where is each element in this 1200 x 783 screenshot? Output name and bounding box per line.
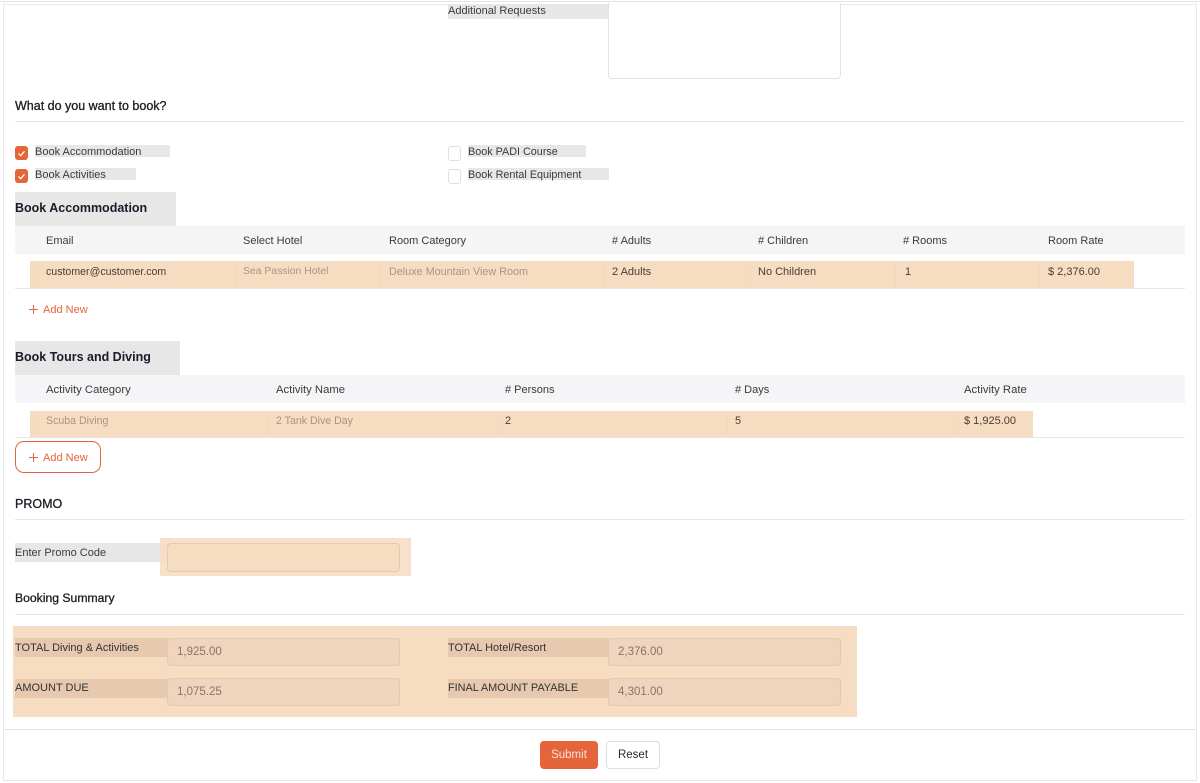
table data row: Scuba Diving <box>46 415 108 427</box>
table header row: # Days <box>735 384 769 396</box>
add new button: tours: Add New <box>43 452 88 464</box>
checkbox: book rental equipment <box>448 168 609 184</box>
amount due label <box>15 679 168 698</box>
total diving label <box>15 638 168 657</box>
checkbox: book padi course: Book PADI Course <box>468 146 558 158</box>
heading: book tours and diving: Book Tours and Diving <box>15 350 151 364</box>
add new link: accommodation: Add New <box>43 304 88 316</box>
table header row: Email <box>46 235 74 247</box>
reset button: Reset <box>618 749 648 761</box>
final amount label <box>448 679 609 698</box>
table header row: # Persons <box>505 384 555 396</box>
checkbox: book accommodation: Book Accommodation <box>35 146 141 158</box>
heading: book accommodation <box>15 192 176 226</box>
heading: book tours and diving <box>15 341 180 375</box>
table data row: customer@customer.com <box>46 266 166 278</box>
amount due value: 1,075.25 <box>177 686 222 698</box>
table header row: Activity Name <box>276 384 345 396</box>
textarea <box>608 3 841 79</box>
label: enter promo code <box>15 543 168 562</box>
table header row: # Rooms <box>903 235 947 247</box>
submit button <box>540 741 598 769</box>
table data row: 1 <box>905 266 911 278</box>
table data row: 2 <box>505 415 511 427</box>
checkbox: book accommodation <box>15 145 170 160</box>
total diving value <box>167 638 400 666</box>
final amount value: 4,301.00 <box>618 686 663 698</box>
add new button: tours <box>15 441 101 473</box>
final amount value <box>608 678 841 706</box>
label: additional requests <box>448 4 609 19</box>
label: enter promo code: Enter Promo Code <box>15 547 106 559</box>
table header row: # Adults <box>612 235 651 247</box>
table header row <box>15 226 1185 254</box>
reset button <box>606 741 660 769</box>
table data row: 5 <box>735 415 741 427</box>
total hotel label <box>448 638 609 657</box>
table data row: 2 Tank Dive Day <box>276 415 353 427</box>
table: tours <box>15 375 1185 437</box>
table data row: Deluxe Mountain View Room <box>389 266 528 278</box>
table data row: No Children <box>758 266 816 278</box>
checkbox: book activities <box>15 168 136 183</box>
label: additional requests: Additional Requests <box>448 5 546 17</box>
promo code field <box>15 538 411 576</box>
heading: book accommodation: Book Accommodation <box>15 201 147 215</box>
booking summary panel <box>13 626 857 717</box>
table header row: # Children <box>758 235 808 247</box>
heading: promo: PROMO <box>15 497 62 511</box>
submit button: Submit <box>551 749 587 761</box>
total hotel value: 2,376.00 <box>618 646 663 658</box>
total diving label: TOTAL Diving & Activities <box>15 642 139 654</box>
table data row: Sea Passion Hotel <box>243 266 328 277</box>
amount due value <box>167 678 400 706</box>
promo highlight <box>160 538 411 576</box>
table header row: Activity Category <box>46 384 131 396</box>
table header row <box>15 375 1185 403</box>
heading: booking summary: Booking Summary <box>15 591 115 605</box>
total hotel label: TOTAL Hotel/Resort <box>448 642 546 654</box>
amount due label: AMOUNT DUE <box>15 682 89 694</box>
table header row: Select Hotel <box>243 235 302 247</box>
table data row: $ 1,925.00 <box>964 415 1016 427</box>
heading: what do you want to book: What do you want to book? <box>15 99 166 113</box>
checkbox: book activities: Book Activities <box>35 169 106 181</box>
checkbox: book rental equipment: Book Rental Equipment <box>468 169 581 181</box>
total diving value: 1,925.00 <box>177 646 222 658</box>
total hotel value <box>608 638 841 666</box>
table data row: $ 2,376.00 <box>1048 266 1100 278</box>
promo input <box>167 543 400 572</box>
checkbox: book padi course <box>448 145 586 161</box>
additional requests field <box>448 3 841 79</box>
table data row: 2 Adults <box>612 266 651 278</box>
table header row: Room Rate <box>1048 235 1104 247</box>
final amount label: FINAL AMOUNT PAYABLE <box>448 682 578 694</box>
table data row <box>30 411 1033 437</box>
table: accommodation <box>15 226 1185 288</box>
table header row: Room Category <box>389 235 466 247</box>
checkbox group <box>15 145 609 184</box>
table header row: Activity Rate <box>964 384 1027 396</box>
table data row <box>30 261 1134 289</box>
